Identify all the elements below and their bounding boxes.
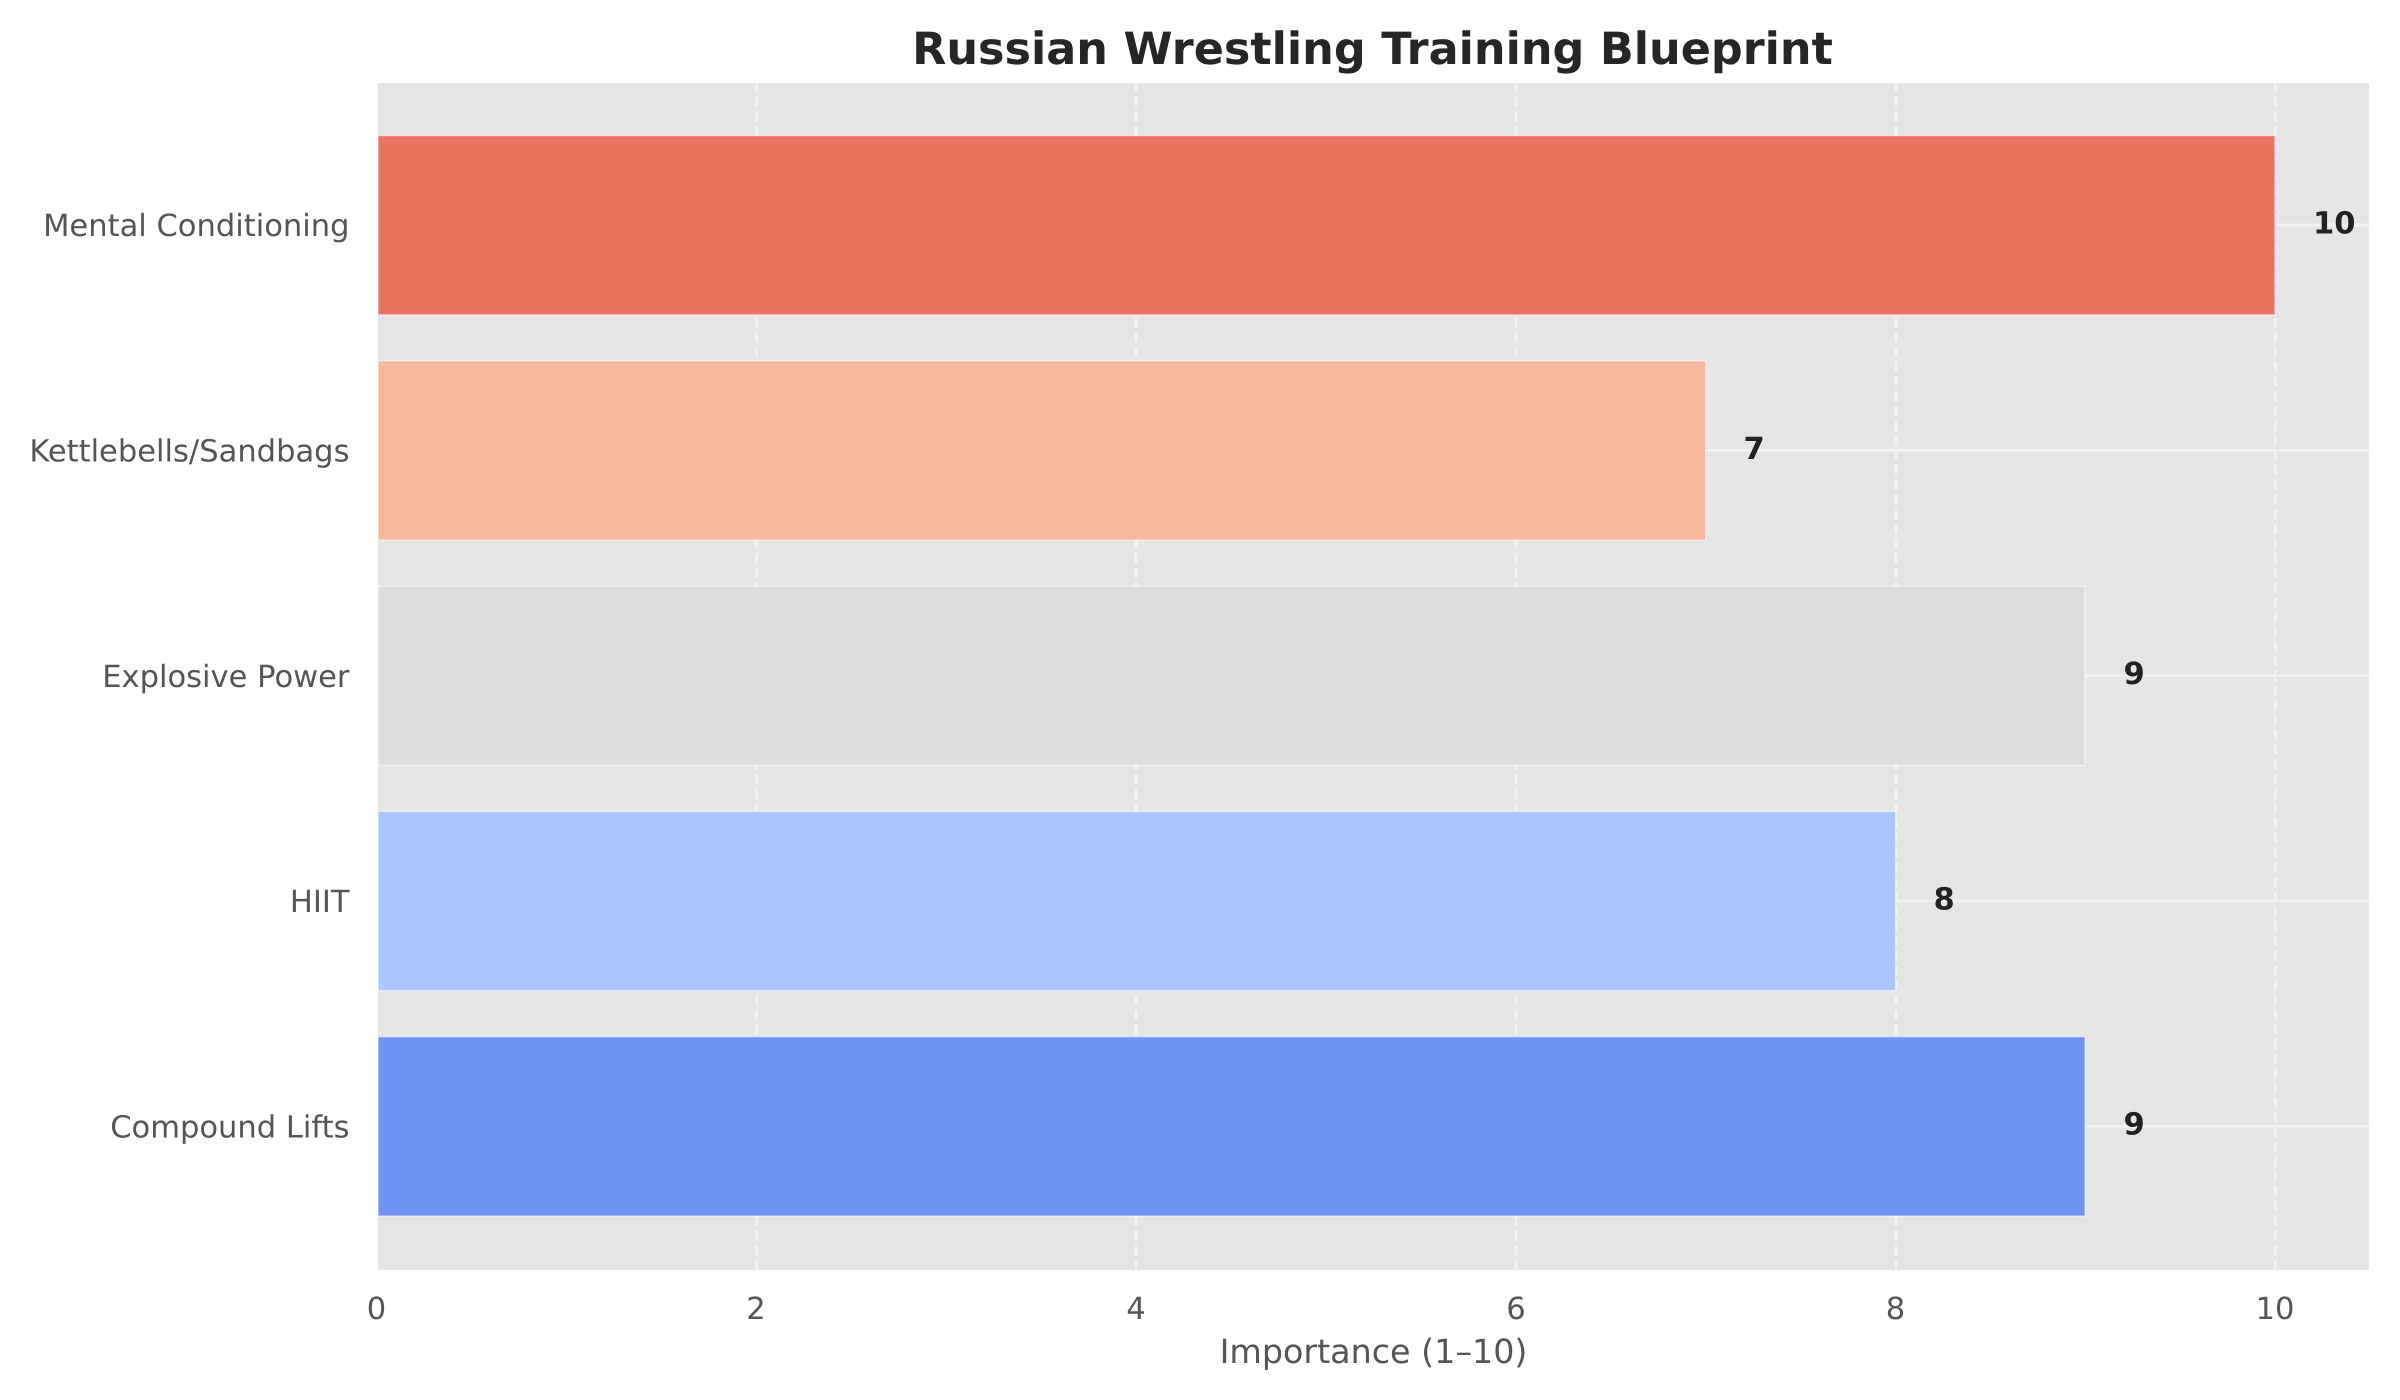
x-axis tick labels: 2 [746, 1292, 766, 1327]
label: Explosive Power: Explosive Power [102, 660, 350, 695]
label: Compound Lifts: Compound Lifts [110, 1110, 350, 1145]
x-axis title: Importance (1–10) [1220, 1332, 1527, 1371]
bar: Explosive Power, 9 [378, 586, 2085, 765]
x-axis tick labels: 0 [367, 1292, 386, 1327]
value: 9 (Explosive Power): 9 [2124, 657, 2145, 692]
bars [378, 136, 2275, 1216]
bar: Compound Lifts, 9 [378, 1037, 2085, 1216]
bar: HIIT, 8 [378, 811, 1896, 991]
label: Kettlebells/Sandbags: Kettlebells/Sandbags [29, 434, 350, 470]
bar: Mental Conditioning, 10 [378, 136, 2275, 315]
title: Russian Wrestling Training Blueprint [912, 24, 1833, 75]
x-axis tick labels [367, 1292, 2294, 1327]
value: 7: 7 [1744, 432, 1765, 467]
value: 9 (Compound Lifts): 9 [2124, 1108, 2145, 1142]
value: 8: 8 [1934, 882, 1955, 918]
value labels [1744, 206, 2356, 1142]
y-axis category labels [29, 209, 350, 1145]
x-axis tick labels: 10 [2256, 1292, 2294, 1327]
plot background [378, 83, 2369, 1270]
x-axis tick labels: 8 [1886, 1292, 1905, 1327]
label: HIIT: HIIT [290, 885, 350, 920]
value: 10: 10 [2313, 206, 2356, 242]
label: Mental Conditioning: Mental Conditioning [43, 209, 350, 244]
x-axis tick labels: 4 [1126, 1292, 1146, 1327]
bar: Kettlebells/Sandbags, 7 [378, 361, 1706, 540]
x-axis tick labels: 6 [1506, 1292, 1526, 1327]
